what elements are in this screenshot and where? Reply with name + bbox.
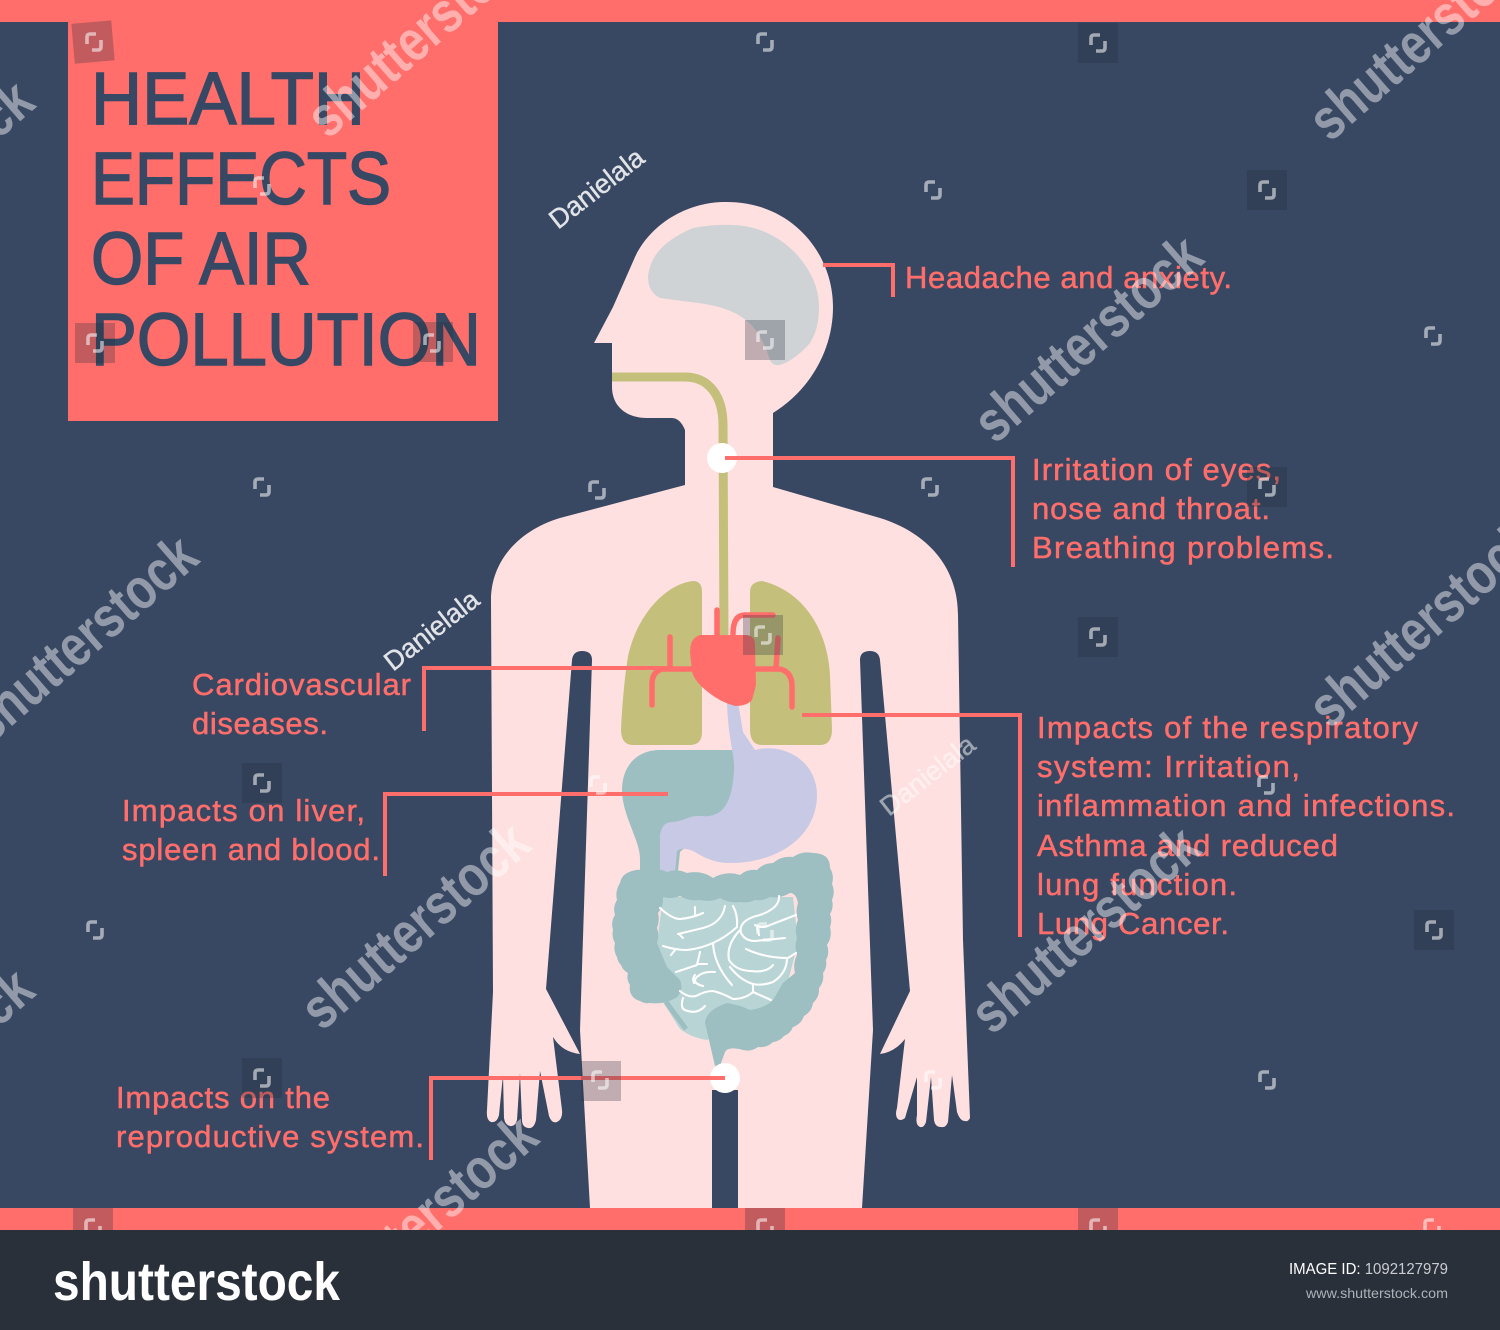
watermark text: Danielala <box>543 142 651 235</box>
callout: irritation: Breathing problems. <box>1032 530 1334 565</box>
panel: title: OF AIR <box>91 217 311 300</box>
intestine folds <box>660 896 796 1012</box>
top band <box>0 0 1500 22</box>
liver <box>622 750 735 880</box>
heart <box>652 610 792 707</box>
callout: cardiovascular <box>192 667 670 741</box>
human body silhouette <box>487 202 970 1208</box>
footer url: www.shutterstock.com <box>1305 1285 1448 1301</box>
callout: headache: Headache and anxiety. <box>905 260 1232 295</box>
marker dots <box>707 443 740 1093</box>
footer logo: shutterstock <box>53 1252 341 1312</box>
stomach <box>660 702 817 872</box>
callout: liver: spleen and blood. <box>122 832 380 867</box>
callout: respiratory: lung function. <box>1037 867 1237 902</box>
callout: respiratory: inflammation and infections. <box>1037 788 1455 823</box>
callout: liver <box>122 793 668 876</box>
image id: IMAGE ID: 1092127979 <box>1289 1261 1448 1278</box>
panel: title <box>68 0 498 421</box>
footer bar <box>0 1230 1500 1330</box>
callout: cardiovascular: diseases. <box>192 706 328 741</box>
large intestine <box>612 852 834 1066</box>
callout: respiratory: system: Irritation, <box>1037 749 1300 784</box>
callout: liver: Impacts on liver, <box>122 793 365 828</box>
callout: respiratory: Asthma and reduced <box>1037 828 1338 863</box>
callout: reproductive <box>116 1078 725 1160</box>
panel: title: HEALTH <box>91 57 365 140</box>
watermark text: shutterstock <box>958 813 1212 1046</box>
lungs <box>621 581 832 745</box>
bottom band <box>0 1208 1500 1230</box>
callout: cardiovascular: Cardiovascular <box>192 667 411 702</box>
panel: title: EFFECTS <box>91 137 391 220</box>
callout: reproductive: Impacts on the <box>116 1080 330 1115</box>
colon strip <box>666 1002 686 1029</box>
small intestine <box>612 852 834 1066</box>
watermark text: Danielala <box>378 584 486 677</box>
callout: irritation <box>725 452 1334 567</box>
airway <box>612 377 724 640</box>
callout: respiratory: Impacts of the respiratory <box>1037 710 1418 745</box>
watermark text: shutterstock <box>296 1102 550 1330</box>
callout: irritation: nose and throat. <box>1032 491 1270 526</box>
callout: irritation: Irritation of eyes, <box>1032 452 1281 487</box>
watermark text: Danielala <box>874 729 982 822</box>
callout: respiratory: Lung Cancer. <box>1037 906 1229 941</box>
watermark text: shutterstock <box>961 222 1215 455</box>
watermark text: shutterstock <box>288 809 542 1042</box>
callout: respiratory <box>802 710 1455 941</box>
brain <box>648 225 819 365</box>
heart vessels <box>652 610 792 707</box>
callout: reproductive: reproductive system. <box>116 1119 424 1154</box>
panel: title: POLLUTION <box>91 298 481 381</box>
